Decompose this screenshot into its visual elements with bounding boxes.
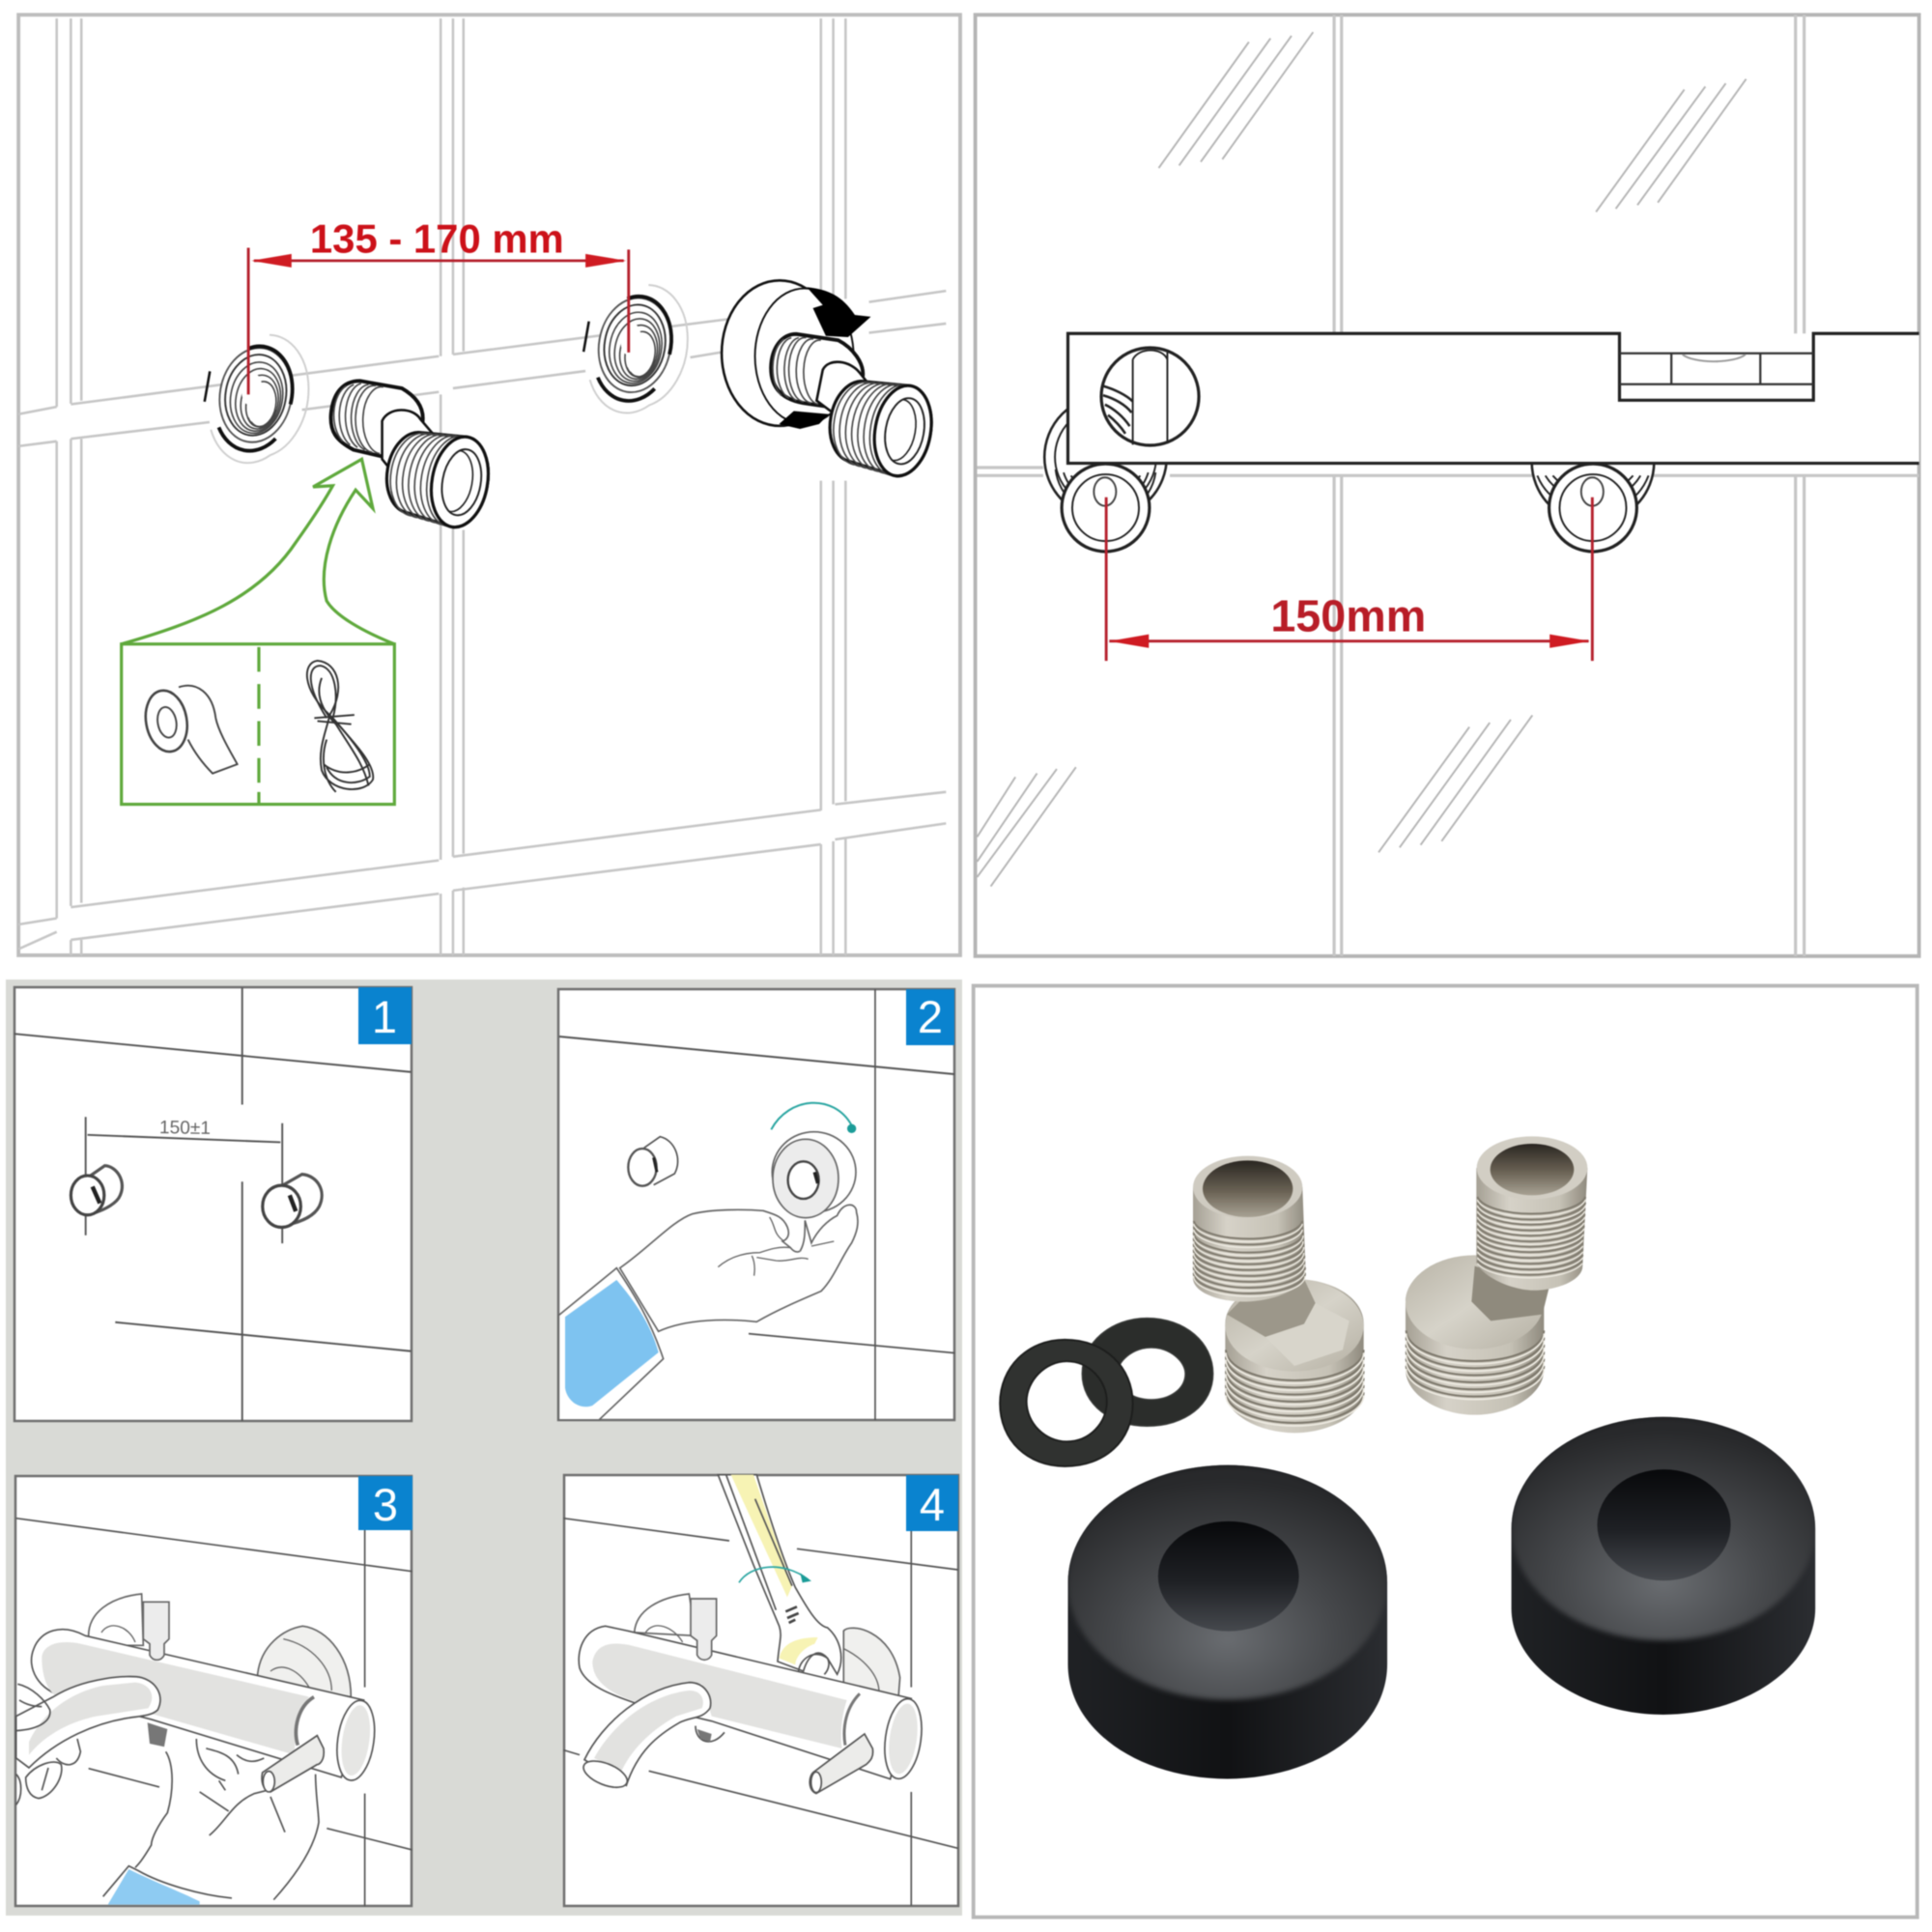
eccentric fitting xyxy=(330,381,495,531)
dimension: 150mm: 150mm xyxy=(1270,590,1426,640)
mixer valve body xyxy=(32,1602,380,1782)
arrow: turn clockwise xyxy=(771,1103,856,1133)
wall holes xyxy=(71,1166,322,1228)
hand with blue sleeve xyxy=(558,1205,858,1420)
hands holding valve xyxy=(16,1684,319,1905)
panel: wall fitting spacing diagram xyxy=(18,14,960,955)
rubber washers xyxy=(1000,1318,1213,1466)
lever handle xyxy=(810,1734,873,1794)
step 1 xyxy=(14,987,412,1421)
tile grid xyxy=(978,14,1919,956)
black cover cap: right xyxy=(1512,1417,1815,1715)
panel: spacing check with spirit level xyxy=(976,14,1919,956)
dimension: 150±1 xyxy=(86,1117,282,1243)
spout xyxy=(16,1677,160,1768)
dimension: 150±1: 150±1 xyxy=(159,1118,211,1139)
step badge 2: 2 xyxy=(918,991,943,1042)
glass hatch marks xyxy=(978,32,1747,887)
wall socket: right xyxy=(575,275,697,422)
step 3 xyxy=(15,1476,412,1906)
step badge 1: 1 xyxy=(372,991,397,1042)
wall fitting: left xyxy=(1044,396,1167,552)
wall socket: left xyxy=(195,326,318,471)
step 4 xyxy=(563,1475,958,1906)
arrow: tighten xyxy=(739,1567,811,1582)
wall fitting: right xyxy=(1532,401,1654,552)
black cover cap: left xyxy=(1067,1465,1387,1778)
icon: tape roll xyxy=(141,686,238,774)
lever handle xyxy=(262,1736,324,1792)
step badge 2 xyxy=(906,989,954,1045)
icon: hemp fibre loop xyxy=(307,661,373,792)
spirit level xyxy=(1068,333,1919,464)
mixer valve body xyxy=(579,1599,926,1781)
level inset: alignment window xyxy=(1101,348,1199,445)
step badge 4 xyxy=(906,1475,958,1531)
dimension: 135 - 170 mm xyxy=(248,216,629,394)
step 2 xyxy=(558,989,954,1420)
panel: product photo of kit parts xyxy=(974,985,1918,1918)
brass fitting: right xyxy=(1406,1136,1587,1415)
dimension: 150mm xyxy=(1106,497,1592,661)
wall flanges xyxy=(635,1594,900,1698)
spanner xyxy=(718,1475,841,1674)
fitted cap xyxy=(772,1132,856,1218)
panel: four-step installation guide xyxy=(6,980,962,1916)
tile grid xyxy=(18,18,946,955)
step badge 1 xyxy=(358,987,412,1044)
fitting with cover cap and rotation arrows xyxy=(722,280,938,480)
wall flanges xyxy=(89,1594,351,1697)
hole xyxy=(628,1137,678,1186)
spout xyxy=(580,1683,711,1793)
step badge 3: 3 xyxy=(373,1479,398,1530)
rotation arrows xyxy=(807,287,870,337)
callout: sealing tape and hemp xyxy=(122,459,394,805)
brass fitting: left xyxy=(1193,1156,1364,1433)
step badge 3 xyxy=(358,1476,412,1530)
step badge 4: 4 xyxy=(920,1479,945,1530)
dimension: 135 - 170 mm: 135 - 170 mm xyxy=(310,216,564,262)
